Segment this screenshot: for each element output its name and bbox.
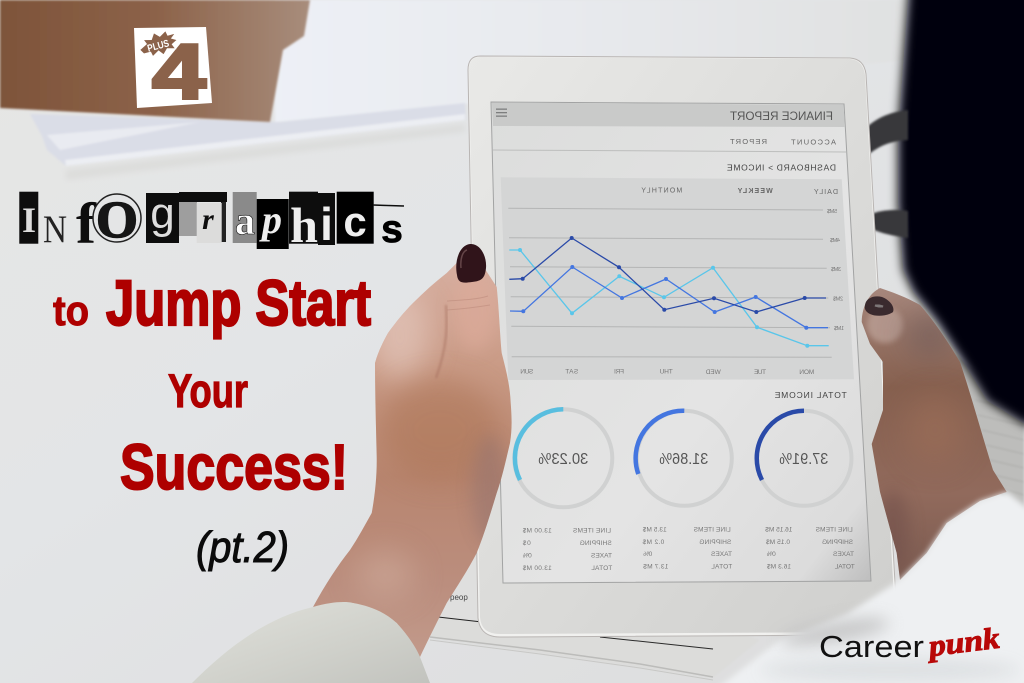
- dark blue series: [509, 236, 826, 314]
- letter I: [19, 192, 38, 244]
- total income heading: TOTAL INCOME: [774, 390, 847, 400]
- table column one: 0%: [766, 551, 776, 558]
- brown folder: [0, 0, 310, 122]
- letter c: [337, 192, 374, 245]
- table column three: TAXES: [590, 552, 612, 560]
- table column one: SHIPPING: [822, 539, 853, 546]
- heading your: Your: [168, 364, 248, 417]
- line chart panel: [501, 177, 854, 380]
- y axis labels: 5M$: [827, 209, 837, 215]
- letter n: N: [43, 208, 67, 251]
- y axis labels: 2M$: [833, 296, 843, 302]
- table column three: SHIPPING: [580, 540, 612, 547]
- breadcrumb: DASHBOARD > INCOME: [727, 162, 836, 172]
- letter r: r: [202, 203, 214, 236]
- coffee mug handle: [866, 110, 908, 238]
- part two note: (pt.2): [196, 523, 289, 572]
- number four: 4: [152, 28, 206, 116]
- x axis labels: FRI: [614, 368, 624, 376]
- table column three: TOTAL: [591, 565, 612, 572]
- account navigation: REPORT: [730, 137, 767, 146]
- thumb nail: [456, 244, 486, 283]
- right sleeve: [715, 492, 1024, 683]
- account navigation: ACCOUNT: [791, 138, 836, 146]
- table column two: SHIPPING: [699, 539, 731, 546]
- letter r: [179, 192, 227, 243]
- left sleeve: [192, 602, 430, 683]
- period tabs: WEEKLY: [737, 188, 773, 195]
- y axis labels: [827, 209, 844, 332]
- table column one: LINE ITEMS: [815, 526, 853, 533]
- table column three: [522, 528, 612, 572]
- letter s: s: [381, 208, 403, 251]
- title infographics ransom note: [19, 189, 404, 256]
- careerpunk logo: [819, 622, 1001, 664]
- heading success: Success!: [120, 431, 348, 503]
- table column one: 16.15 M$: [765, 526, 792, 533]
- heading to jump start: Jump Start: [106, 267, 371, 339]
- x axis labels: WED: [705, 369, 721, 376]
- finger nail: [865, 296, 893, 316]
- table column one: TOTAL: [834, 564, 855, 571]
- table column one: 0.15 M$: [766, 539, 790, 546]
- table column two: TOTAL: [711, 564, 732, 571]
- finance report header bar: [492, 102, 845, 127]
- y axis labels: 4M$: [830, 238, 840, 244]
- finance report header bar: FINANCE REPORT: [730, 111, 833, 123]
- letter O: O: [96, 192, 138, 249]
- donut 37.91 percent: 37.91%: [779, 451, 828, 468]
- papers behind folder: [30, 0, 905, 166]
- donut 30.23 percent: [514, 409, 612, 507]
- letter i: [318, 193, 335, 250]
- donut 30.23 percent: 30.23%: [538, 451, 588, 468]
- heading to jump start: [53, 267, 371, 339]
- table column two: LINE ITEMS: [693, 526, 731, 533]
- letter h: h: [290, 197, 318, 253]
- period tabs: [641, 188, 838, 196]
- letter g: [146, 189, 179, 243]
- wordmark career: Career: [819, 629, 924, 664]
- left hand holding tablet: [313, 244, 512, 657]
- patterned paper under right arm: [950, 350, 1024, 515]
- letter a: a: [235, 198, 255, 243]
- letter p: p: [259, 197, 282, 242]
- shadow below papers: [66, 124, 465, 180]
- mid blue series: [510, 265, 828, 330]
- light blue series: [509, 248, 829, 348]
- x axis labels: SAT: [565, 368, 578, 376]
- tablet: [468, 56, 897, 637]
- x axis labels: TUE: [753, 369, 766, 376]
- table column two: 0.2 M$: [642, 539, 664, 546]
- table column three: 0 $: [522, 540, 531, 547]
- donut 37.91 percent: [756, 411, 852, 506]
- table column three: 0%: [522, 552, 532, 560]
- plus 4 badge: [134, 27, 212, 116]
- table column two: [642, 526, 732, 571]
- letter f: f: [76, 191, 97, 256]
- stack of papers under tablet: [425, 540, 760, 680]
- letter c: c: [343, 198, 367, 245]
- letter I: I: [22, 200, 36, 240]
- y axis labels: 3M$: [831, 267, 841, 273]
- period tabs: MONTHLY: [641, 188, 682, 194]
- period tabs: DAILY: [814, 189, 838, 196]
- letter p: [257, 197, 289, 249]
- table column two: TAXES: [710, 551, 732, 558]
- stack of papers under tablet: peop: [450, 593, 468, 602]
- account navigation: [730, 137, 836, 146]
- dark hair: [898, 0, 1024, 440]
- donut 31.86 percent: 31.86%: [659, 451, 708, 468]
- letter i: i: [320, 198, 333, 250]
- heading to jump start: to: [53, 287, 89, 334]
- table column two: 13.7 M$: [643, 564, 668, 571]
- table column two: 13.5 M$: [642, 526, 667, 533]
- table column three: 13.00 M$: [522, 565, 552, 572]
- table column one: [765, 526, 855, 571]
- x axis labels: [520, 368, 814, 376]
- table column one: TAXES: [832, 551, 854, 558]
- table column one: 16.3 M$: [767, 564, 791, 571]
- table column two: 0%: [643, 551, 652, 558]
- wordmark punk: punk: [924, 622, 1001, 664]
- x axis labels: MON: [799, 369, 814, 376]
- crease between thumb and fingers: [436, 305, 447, 378]
- table column three: LINE ITEMS: [572, 528, 611, 534]
- table column three: 13.00 M$: [522, 528, 552, 534]
- x axis labels: SUN: [520, 368, 533, 376]
- y axis labels: 1M$: [834, 326, 844, 332]
- x axis labels: THU: [659, 368, 673, 376]
- donut 31.86 percent: [636, 411, 732, 506]
- plus starburst: PLUS: [146, 38, 171, 55]
- tablet screen: [491, 102, 871, 583]
- letter g: g: [150, 189, 175, 238]
- right hand holding tablet: [862, 288, 1006, 580]
